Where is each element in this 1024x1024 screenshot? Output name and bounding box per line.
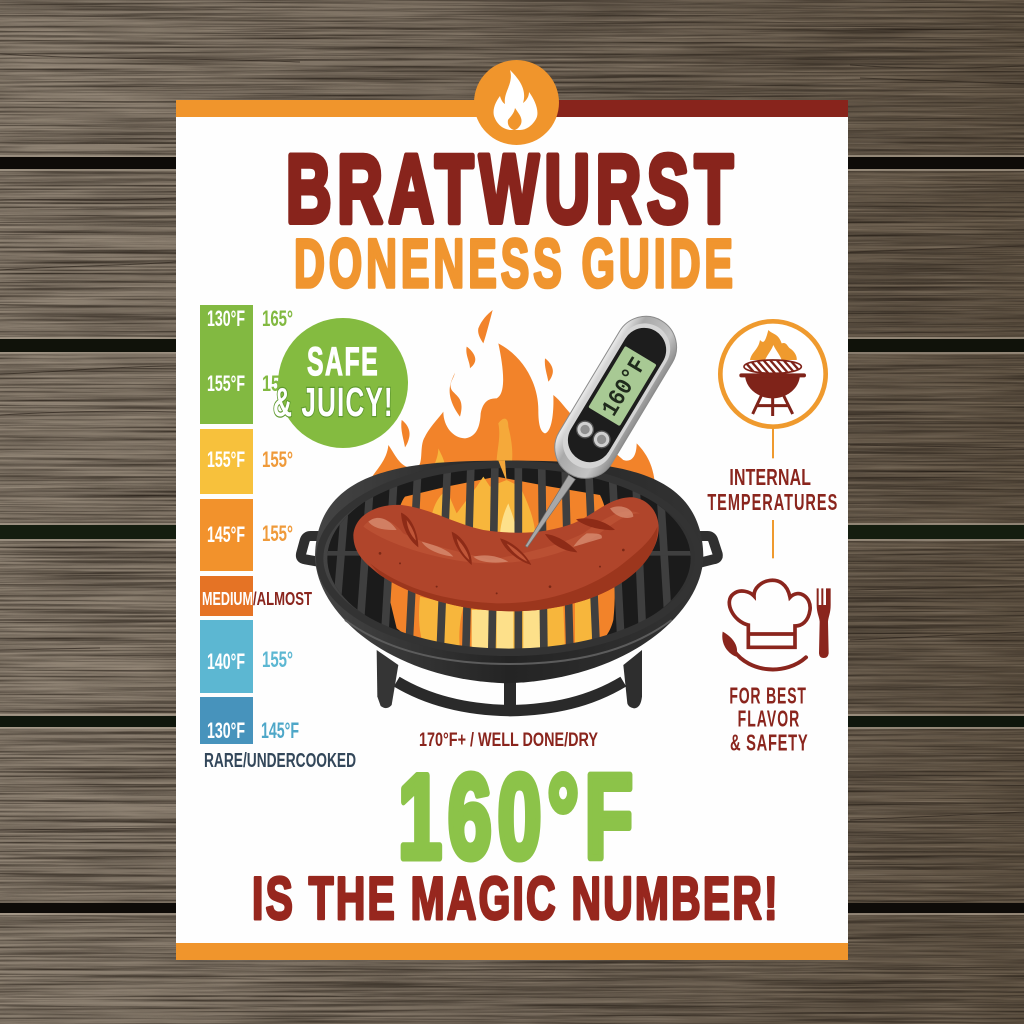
title: BRATWURST bbox=[286, 135, 733, 243]
bar: medium almost: /ALMOST bbox=[253, 588, 312, 609]
bar: yellow: 155°F bbox=[207, 447, 245, 472]
poster panel bbox=[176, 100, 848, 960]
main illustration: grill, sausage and thermometer bbox=[301, 305, 718, 712]
temperature scale chart bbox=[200, 305, 356, 772]
bar: orange: 145°F bbox=[207, 522, 245, 547]
tagline: IS THE MAGIC NUMBER! bbox=[252, 865, 778, 932]
badge: safe and juicy bbox=[273, 318, 408, 448]
bar: safe green: 165° bbox=[262, 306, 293, 331]
grill rim bbox=[320, 461, 698, 664]
label: for best flavor and safety: & SAFETY bbox=[730, 730, 808, 757]
bar: orange: 155° bbox=[262, 521, 293, 546]
label: for best flavor and safety: FLAVOR bbox=[738, 707, 799, 733]
bar: yellow bbox=[200, 429, 293, 494]
bar: blue bbox=[200, 697, 299, 744]
bratwurst sausage bbox=[353, 497, 659, 611]
right column icons bbox=[707, 321, 837, 757]
connector line bbox=[772, 520, 774, 558]
bar: orange bbox=[200, 499, 293, 571]
bar: light blue: 140°F bbox=[207, 649, 245, 674]
subtitle: DONENESS GUIDE bbox=[294, 226, 733, 303]
yellow fire bbox=[419, 477, 593, 653]
grill interior, fire and bars bbox=[327, 468, 690, 649]
bar: medium almost bbox=[200, 576, 312, 616]
grill bowl bbox=[315, 461, 703, 683]
badge: safe and juicy: & JUICY! bbox=[273, 380, 393, 426]
label: for best flavor and safety bbox=[729, 684, 808, 757]
big number: 160 degrees: 160°F bbox=[398, 749, 633, 884]
grill handles bbox=[301, 536, 718, 563]
bar: blue: 145°F bbox=[261, 718, 299, 743]
pale fire core bbox=[472, 503, 540, 655]
label: internal temperatures: INTERNAL bbox=[729, 465, 811, 491]
grill legs and base ring bbox=[377, 650, 642, 712]
bar: medium almost: MEDIUM bbox=[202, 588, 253, 609]
bar: light blue: 155° bbox=[262, 647, 293, 672]
connector line bbox=[772, 428, 774, 458]
thermometer probe bbox=[525, 475, 575, 547]
flames behind grill bbox=[362, 310, 655, 500]
digital thermometer: 160°F bbox=[597, 353, 653, 422]
bar: safe green: 15 bbox=[262, 371, 280, 396]
bar: safe green bbox=[200, 305, 293, 424]
label: rare: RARE/UNDERCOOKED bbox=[204, 749, 356, 772]
bar: yellow: 155° bbox=[262, 447, 293, 472]
orange fire bbox=[387, 477, 615, 653]
bar: safe green: 155°F bbox=[207, 371, 245, 396]
label: internal temperatures: TEMPERATURES bbox=[707, 491, 837, 516]
icon: flame badge bbox=[474, 60, 559, 145]
label: internal temperatures bbox=[707, 465, 837, 516]
label: for best flavor and safety: FOR BEST bbox=[729, 684, 806, 709]
icon: chef hat with spoon and fork bbox=[722, 580, 831, 669]
label: well done: 170°F+ / WELL DONE/DRY bbox=[419, 729, 598, 751]
digital thermometer bbox=[543, 305, 688, 490]
badge: safe and juicy: SAFE bbox=[307, 340, 378, 385]
bar: light blue bbox=[200, 620, 293, 693]
icon: kettle grill in ring bbox=[720, 321, 826, 427]
bar: blue: 130°F bbox=[207, 718, 245, 743]
bar: safe green: 130°F bbox=[207, 306, 245, 331]
